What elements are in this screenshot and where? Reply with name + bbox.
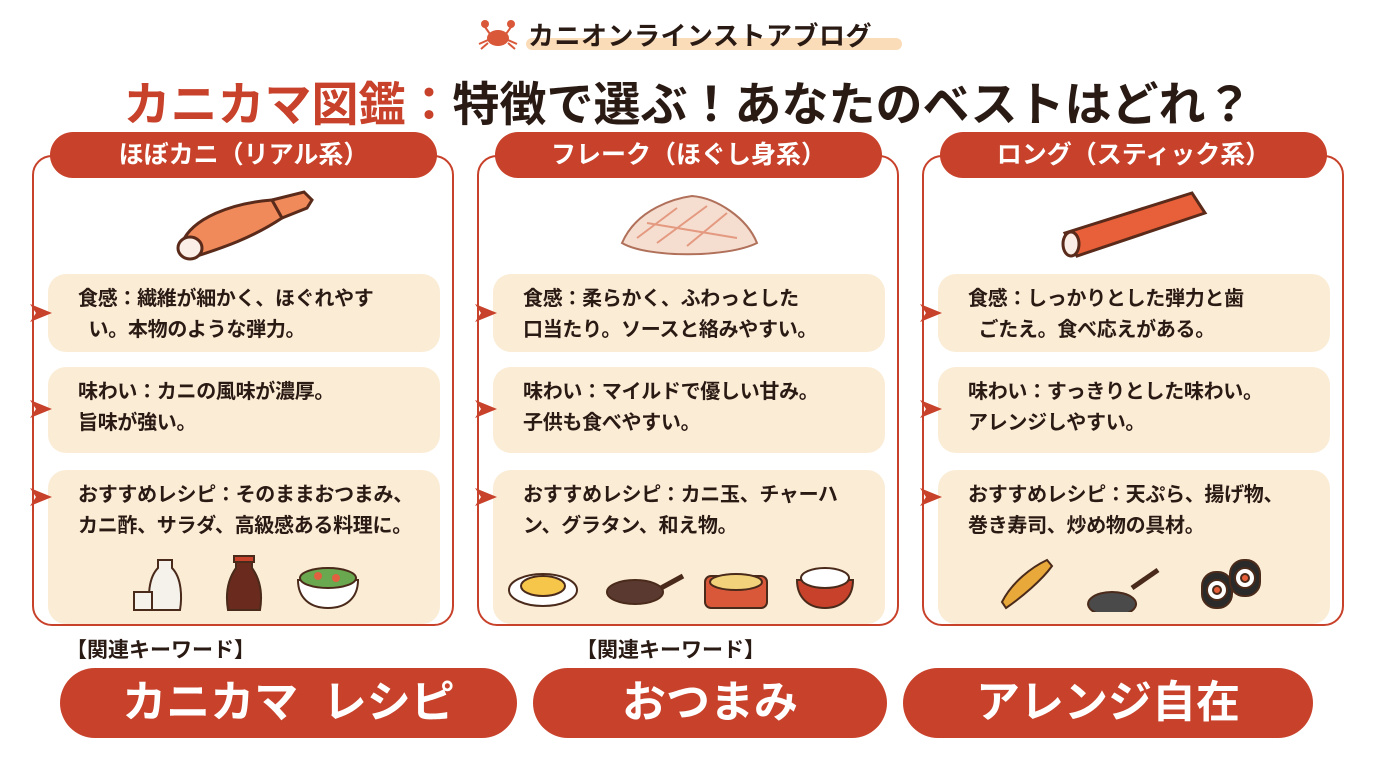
keyword pill: otsumami: おつまみ bbox=[622, 678, 798, 727]
heading: long: ロング（スティック系） bbox=[997, 141, 1270, 169]
icon: crab stick bbox=[1062, 191, 1208, 258]
heading: real bbox=[50, 132, 437, 178]
text: recipe: 巻き寿司、炒め物の具材。 bbox=[968, 515, 1204, 537]
keyword pill: arrange bbox=[903, 668, 1313, 738]
arrow bbox=[30, 400, 52, 418]
heading: flake bbox=[495, 132, 882, 178]
text: recipe: ン、グラタン、和え物。 bbox=[523, 515, 737, 537]
arrow bbox=[475, 304, 497, 322]
icons: omelet, pan, gratin, rice bbox=[508, 567, 854, 609]
text: taste: 味わい：マイルドで優しい甘み。 bbox=[523, 381, 818, 403]
panel: real bbox=[30, 132, 454, 626]
keyword pill: recipe bbox=[60, 668, 517, 738]
keyword pill: recipe: カニカマ レシピ bbox=[122, 678, 455, 727]
text: taste: 味わい：カニの風味が濃厚。 bbox=[78, 381, 334, 403]
text: recipe: おすすめレシピ：カニ玉、チャーハ bbox=[523, 484, 838, 506]
text: texture: ごたえ。食べ応えがある。 bbox=[978, 319, 1215, 341]
text: taste bbox=[48, 367, 440, 453]
brand header bbox=[478, 20, 902, 51]
icon: flakes pile bbox=[620, 195, 758, 256]
text: taste: アレンジしやすい。 bbox=[968, 412, 1145, 434]
heading: long bbox=[940, 132, 1327, 178]
icons: tempura, pan, sushi bbox=[1000, 558, 1261, 612]
icons: sake, soy sauce, salad bbox=[133, 555, 359, 611]
icon: crab bbox=[478, 20, 518, 50]
arrow bbox=[920, 304, 942, 322]
text: recipe: おすすめレシピ：天ぷら、揚げ物、 bbox=[968, 484, 1283, 506]
text: texture: い。本物のような弾力。 bbox=[88, 319, 305, 341]
arrow bbox=[920, 400, 942, 418]
icon: crab leg bbox=[176, 190, 314, 260]
text: recipe: カニ酢、サラダ、高級感ある料理に。 bbox=[78, 515, 412, 537]
arrow bbox=[30, 488, 52, 506]
heading: flake: フレーク（ほぐし身系） bbox=[551, 141, 826, 169]
text: recipe bbox=[493, 470, 885, 624]
panel: long bbox=[920, 132, 1344, 626]
text: recipe: おすすめレシピ：そのままおつまみ、 bbox=[78, 484, 413, 506]
arrow bbox=[30, 304, 52, 322]
text: taste bbox=[938, 367, 1330, 453]
arrow bbox=[475, 400, 497, 418]
panel: flake bbox=[475, 132, 899, 626]
arrow bbox=[475, 488, 497, 506]
text: texture: 食感：しっかりとした弾力と歯 bbox=[968, 288, 1244, 310]
text: texture bbox=[938, 274, 1330, 352]
label: keywords 2: 【関連キーワード】 bbox=[576, 639, 765, 662]
arrow bbox=[920, 488, 942, 506]
text: texture: 食感：柔らかく、ふわっとした bbox=[523, 288, 799, 310]
text: texture bbox=[493, 274, 885, 352]
text: recipe bbox=[938, 470, 1330, 624]
text: taste: 旨味が強い。 bbox=[78, 412, 196, 434]
text: recipe bbox=[48, 470, 440, 624]
text: texture: 口当たり。ソースと絡みやすい。 bbox=[523, 319, 817, 341]
keyword pill: arrange: アレンジ自在 bbox=[976, 678, 1240, 727]
text: taste: 子供も食べやすい。 bbox=[523, 412, 700, 434]
text: texture bbox=[48, 274, 440, 352]
label: keywords 1: 【関連キーワード】 bbox=[66, 639, 255, 662]
brand text: カニオンラインストアブログ bbox=[528, 21, 872, 51]
text: taste: 味わい：すっきりとした味わい。 bbox=[968, 381, 1263, 403]
keyword pill: otsumami bbox=[533, 668, 887, 738]
heading: real: ほぼカニ（リアル系） bbox=[119, 141, 368, 169]
title: カニカマ図鑑：特徴で選ぶ！あなたのベストはどれ？ bbox=[124, 78, 1252, 131]
text: texture: 食感：繊維が細かく、ほぐれやす bbox=[78, 288, 374, 310]
text: taste bbox=[493, 367, 885, 453]
